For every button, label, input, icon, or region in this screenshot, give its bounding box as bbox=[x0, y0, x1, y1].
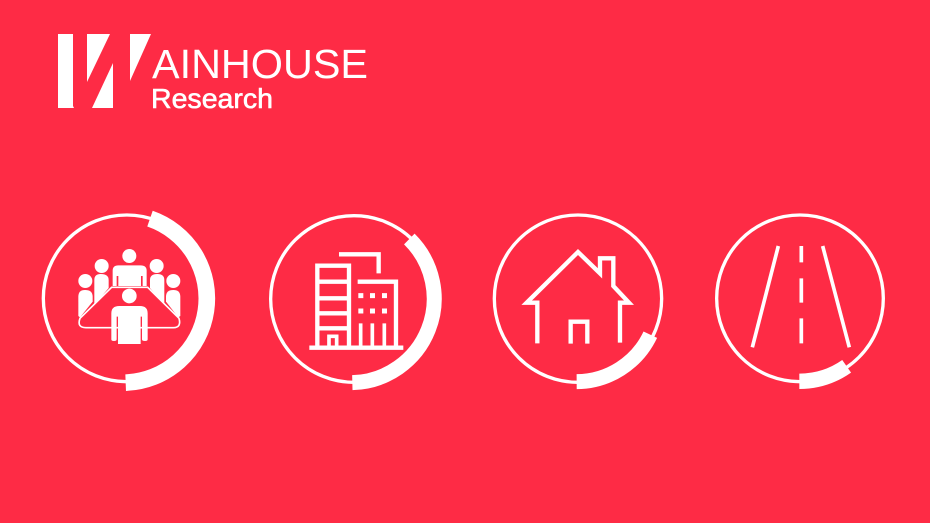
icon circle: road bbox=[717, 215, 883, 382]
logo: Wainhouse Research bbox=[58, 34, 368, 114]
icon: house bbox=[527, 252, 629, 344]
logo subtitle: Research bbox=[151, 83, 273, 114]
logo wordmark: AINHOUSE bbox=[152, 41, 368, 87]
icon: road lanes bbox=[752, 246, 849, 347]
icon circle: office buildings bbox=[271, 216, 437, 383]
logo mark: stylised W bbox=[58, 34, 151, 108]
icon: people around a table bbox=[78, 249, 180, 344]
progress ring bbox=[717, 215, 883, 382]
progress ring bbox=[43, 215, 210, 383]
icon: buildings and crane bbox=[309, 254, 403, 348]
icon circle: home bbox=[494, 215, 662, 382]
progress ring bbox=[271, 216, 437, 383]
progress ring bbox=[494, 215, 662, 382]
icon circle: meeting room bbox=[43, 215, 210, 383]
